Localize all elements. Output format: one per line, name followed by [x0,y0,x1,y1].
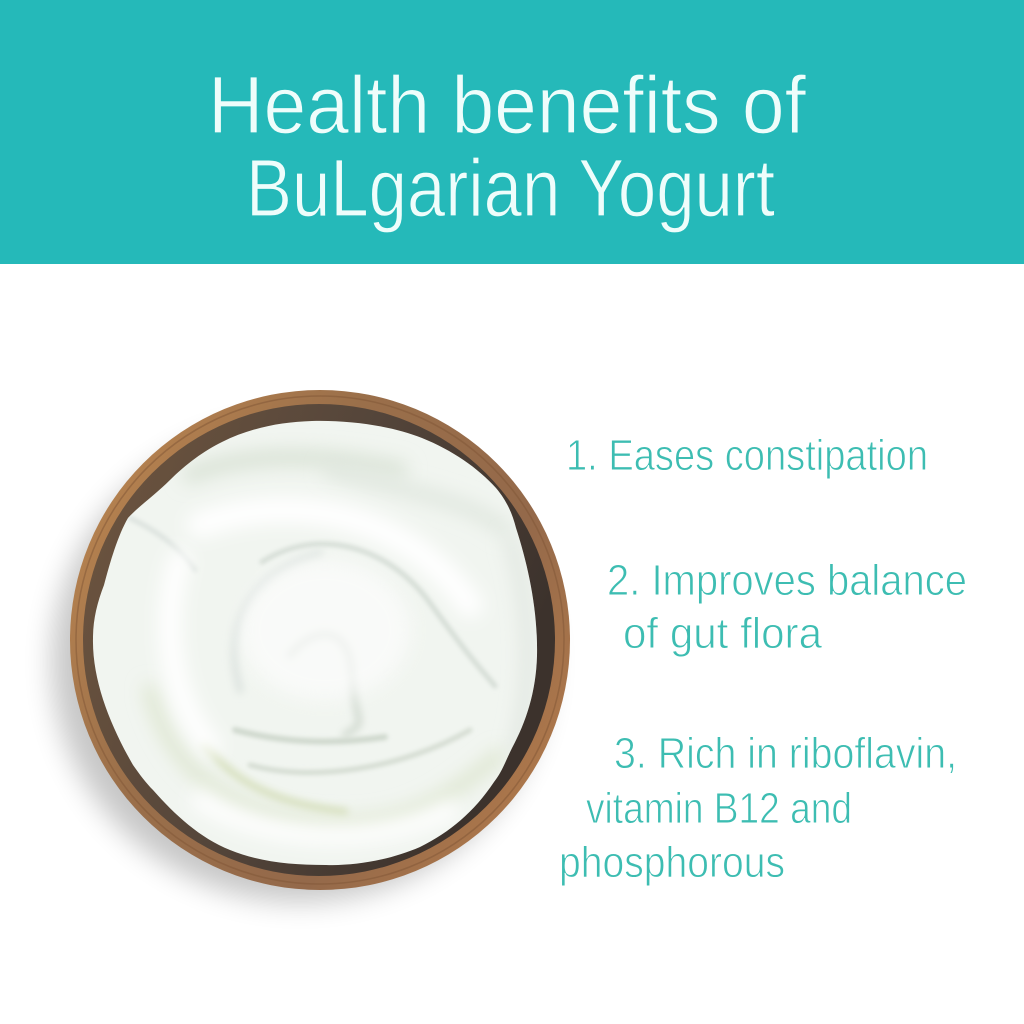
benefit 2: 2. Improves balance [607,556,967,605]
title: BuLgarian Yogurt [246,143,775,234]
benefit 1: 1. Eases constipation [566,431,928,480]
title [208,60,806,234]
benefit 2: of gut flora [623,609,823,658]
wooden rim [70,390,570,890]
benefit 3: phosphorous [559,838,785,887]
header band [0,0,1024,264]
yogurt bowl [70,390,570,890]
benefit 3: vitamin B12 and [586,784,852,833]
title: Health benefits of [208,60,806,151]
benefit 3 [559,729,957,887]
benefit 3: 3. Rich in riboflavin, [614,729,957,778]
bowl inner wall [83,404,555,876]
yogurt surface [92,420,538,866]
benefit 2 [607,556,967,658]
bowl shadow [52,422,548,902]
